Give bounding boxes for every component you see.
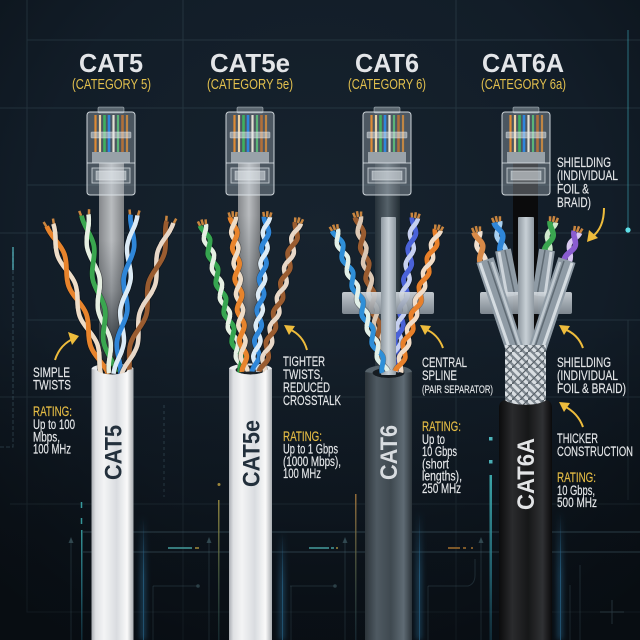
rating: CAT6: 10 Gbps — [422, 444, 457, 459]
rating: CAT5e: (1000 Mbps), — [283, 454, 341, 469]
callout: central spline: (PAIR SEPARATOR) — [422, 384, 493, 396]
rating: CAT5e: RATING: — [283, 429, 322, 444]
rating: CAT6A: 500 MHz — [557, 495, 597, 510]
callout: simple twists — [33, 365, 71, 392]
callout: tighter twists: TIGHTER — [283, 354, 325, 369]
central spline — [342, 217, 434, 375]
callout: central spline — [422, 355, 493, 396]
callout: simple twists: TWISTS — [33, 378, 71, 392]
rear wire pairs — [353, 211, 420, 372]
rating: CAT6A — [557, 470, 597, 510]
rating: CAT5: Up to 100 — [33, 417, 75, 432]
front wire pairs — [329, 223, 443, 373]
cable jacket — [92, 369, 134, 640]
callout: shielding lower: (INDIVIDUAL — [557, 368, 618, 383]
RJ45 connector — [363, 107, 411, 195]
callout: tighter twists — [283, 354, 341, 408]
cable jacket — [229, 369, 272, 640]
rating: CAT5e: 100 MHz — [283, 466, 321, 481]
RJ45 connector — [226, 107, 274, 195]
cable core behind connector — [513, 163, 538, 353]
cable core behind connector — [238, 163, 260, 368]
subtitle: Category 5: (CATEGORY 5) — [72, 76, 151, 93]
title: CAT6A: CAT6A — [482, 48, 564, 78]
rating: CAT5: RATING: — [33, 404, 72, 419]
jacket label: CAT6 — [376, 425, 403, 480]
callout: thicker construction: THICKER — [557, 431, 598, 446]
rating: CAT5 — [33, 404, 75, 456]
rating: CAT5: Mbps, — [33, 430, 60, 444]
callout arrow: simple twists — [55, 332, 79, 360]
cable core behind connector — [99, 163, 124, 368]
jacket back rim — [365, 365, 412, 379]
rating: CAT6: (short — [422, 456, 449, 472]
column: CAT6A — [472, 48, 633, 640]
rating: CAT5e: Up to 1 Gbps — [283, 442, 338, 456]
callout arrow: shielding upper — [587, 208, 604, 242]
callout: shielding lower — [557, 355, 626, 396]
rating: CAT6: Up to — [422, 432, 445, 447]
cable jacket — [499, 400, 552, 640]
callout: tighter twists: TWISTS, — [283, 367, 323, 382]
rating: CAT5: 100 MHz — [33, 442, 71, 456]
rear foil pairs — [492, 215, 558, 296]
callout: central spline: SPLINE — [422, 368, 457, 383]
callout arrow: thicker construction — [559, 402, 583, 427]
callout arrow: tighter twists — [284, 325, 307, 350]
jacket back rim — [92, 364, 134, 374]
central spline — [480, 217, 572, 352]
callout: thicker construction — [557, 431, 633, 459]
cable core behind connector — [375, 163, 400, 368]
jacket back rim — [229, 364, 272, 374]
column: CAT5e — [198, 48, 341, 640]
callout arrow: shielding lower — [559, 325, 583, 348]
rating: CAT6A: RATING: — [557, 470, 596, 485]
front foil pairs — [472, 225, 583, 350]
jacket label: CAT5e — [238, 420, 266, 487]
subtitle: Category 6a: (CATEGORY 6a) — [481, 76, 566, 93]
callout: shielding upper: SHIELDING — [557, 155, 611, 170]
callout: shielding upper: BRAID) — [557, 195, 591, 210]
callout arrow: central spline — [420, 325, 443, 348]
callout: shielding upper: FOIL & — [557, 182, 589, 196]
rating: CAT6A: 10 Gbps, — [557, 483, 595, 498]
subtitle: Category 5e: (CATEGORY 5e) — [207, 76, 293, 93]
braided shield — [505, 345, 546, 412]
twisted wire pairs — [44, 209, 176, 377]
title: CAT5: CAT5 — [79, 48, 143, 78]
twisted wire pairs — [198, 211, 303, 373]
jacket label: CAT5 — [100, 425, 128, 480]
title: CAT5e: CAT5e — [210, 48, 290, 78]
callout: shielding upper — [557, 155, 618, 210]
rating: CAT6: RATING: — [422, 419, 461, 434]
callout: central spline: CENTRAL — [422, 355, 467, 370]
RJ45 connector — [502, 107, 550, 195]
RJ45 connector — [87, 107, 135, 195]
column: CAT6 — [329, 48, 493, 640]
jacket label: CAT6A — [513, 438, 540, 510]
title: CAT6: CAT6 — [355, 48, 419, 78]
rating: CAT6: 250 MHz — [422, 481, 461, 496]
rating: CAT6: lengths), — [422, 468, 462, 484]
subtitle: Category 6: (CATEGORY 6) — [348, 76, 426, 93]
column: CAT5 — [33, 48, 176, 640]
callout: shielding upper: (INDIVIDUAL — [557, 168, 618, 183]
rating: CAT6 — [422, 419, 462, 496]
rating: CAT5e — [283, 429, 341, 481]
callout: shielding lower: SHIELDING — [557, 355, 611, 370]
callout: tighter twists: CROSSTALK — [283, 393, 341, 408]
cable jacket — [365, 372, 412, 640]
callout: tighter twists: REDUCED — [283, 380, 330, 395]
callout: simple twists: SIMPLE — [33, 365, 70, 380]
